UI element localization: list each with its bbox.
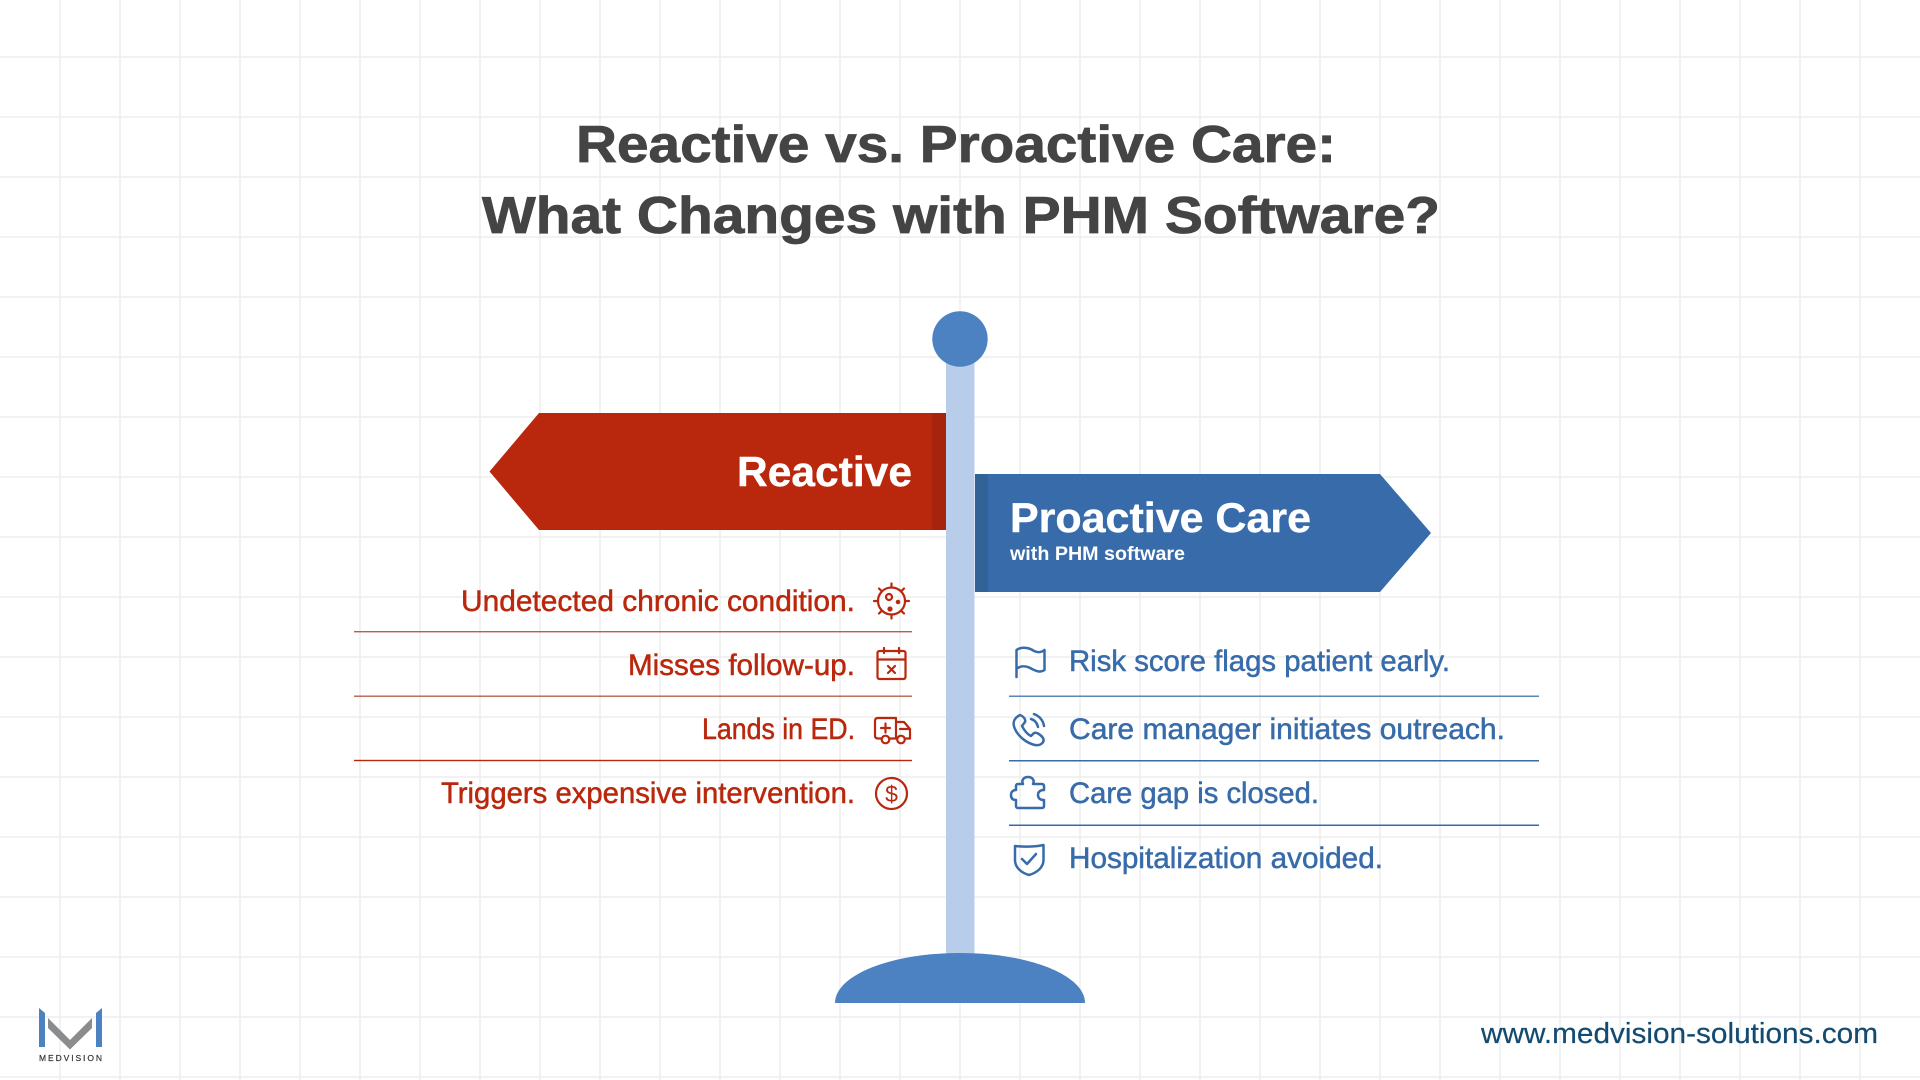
logo xyxy=(39,1008,102,1063)
step: care gap closed: Care gap is closed. xyxy=(1069,777,1319,810)
title: Reactive vs. Proactive Care: xyxy=(576,116,1336,174)
title: What Changes with PHM Software? xyxy=(482,187,1440,245)
icon: phone xyxy=(1014,714,1044,745)
step: hospitalization avoided: Hospitalization avoided. xyxy=(1069,842,1383,875)
icon: shield check xyxy=(1015,845,1044,875)
step: care manager outreach: Care manager initiates outreach. xyxy=(1069,713,1505,746)
signpost top knob xyxy=(932,311,988,367)
reactive arrow sign xyxy=(490,413,946,530)
icon: ambulance xyxy=(875,718,910,743)
icon: flag xyxy=(1016,648,1044,677)
title xyxy=(482,116,1440,245)
step: triggers expensive intervention: Triggers expensive intervention. xyxy=(441,777,855,810)
icon: virus xyxy=(874,584,909,618)
icon: puzzle piece xyxy=(1011,777,1044,808)
step: undetected chronic condition: Undetected chronic condition. xyxy=(461,585,855,618)
step: lands in ED: Lands in ED. xyxy=(702,713,855,746)
icon: calendar with x xyxy=(878,648,906,679)
panel: reactive steps xyxy=(354,584,912,810)
signpost xyxy=(835,311,1085,1003)
website url: www.medvision-solutions.com xyxy=(1480,1018,1878,1050)
step: misses follow-up: Misses follow-up. xyxy=(628,649,855,682)
logo: MEDVISION xyxy=(39,1053,102,1063)
proactive arrow sign: with PHM software xyxy=(1009,544,1185,565)
icon: dollar coin xyxy=(876,778,907,809)
icon: dollar coin: $ xyxy=(885,781,898,807)
signpost pole xyxy=(946,340,974,960)
proactive arrow sign: Proactive Care xyxy=(1010,494,1311,541)
reactive arrow sign: Reactive xyxy=(737,448,912,495)
signpost base xyxy=(835,953,1085,1003)
step: risk score flags: Risk score flags patient early. xyxy=(1069,645,1450,678)
panel: proactive steps xyxy=(1009,645,1539,875)
proactive arrow sign xyxy=(975,474,1431,592)
